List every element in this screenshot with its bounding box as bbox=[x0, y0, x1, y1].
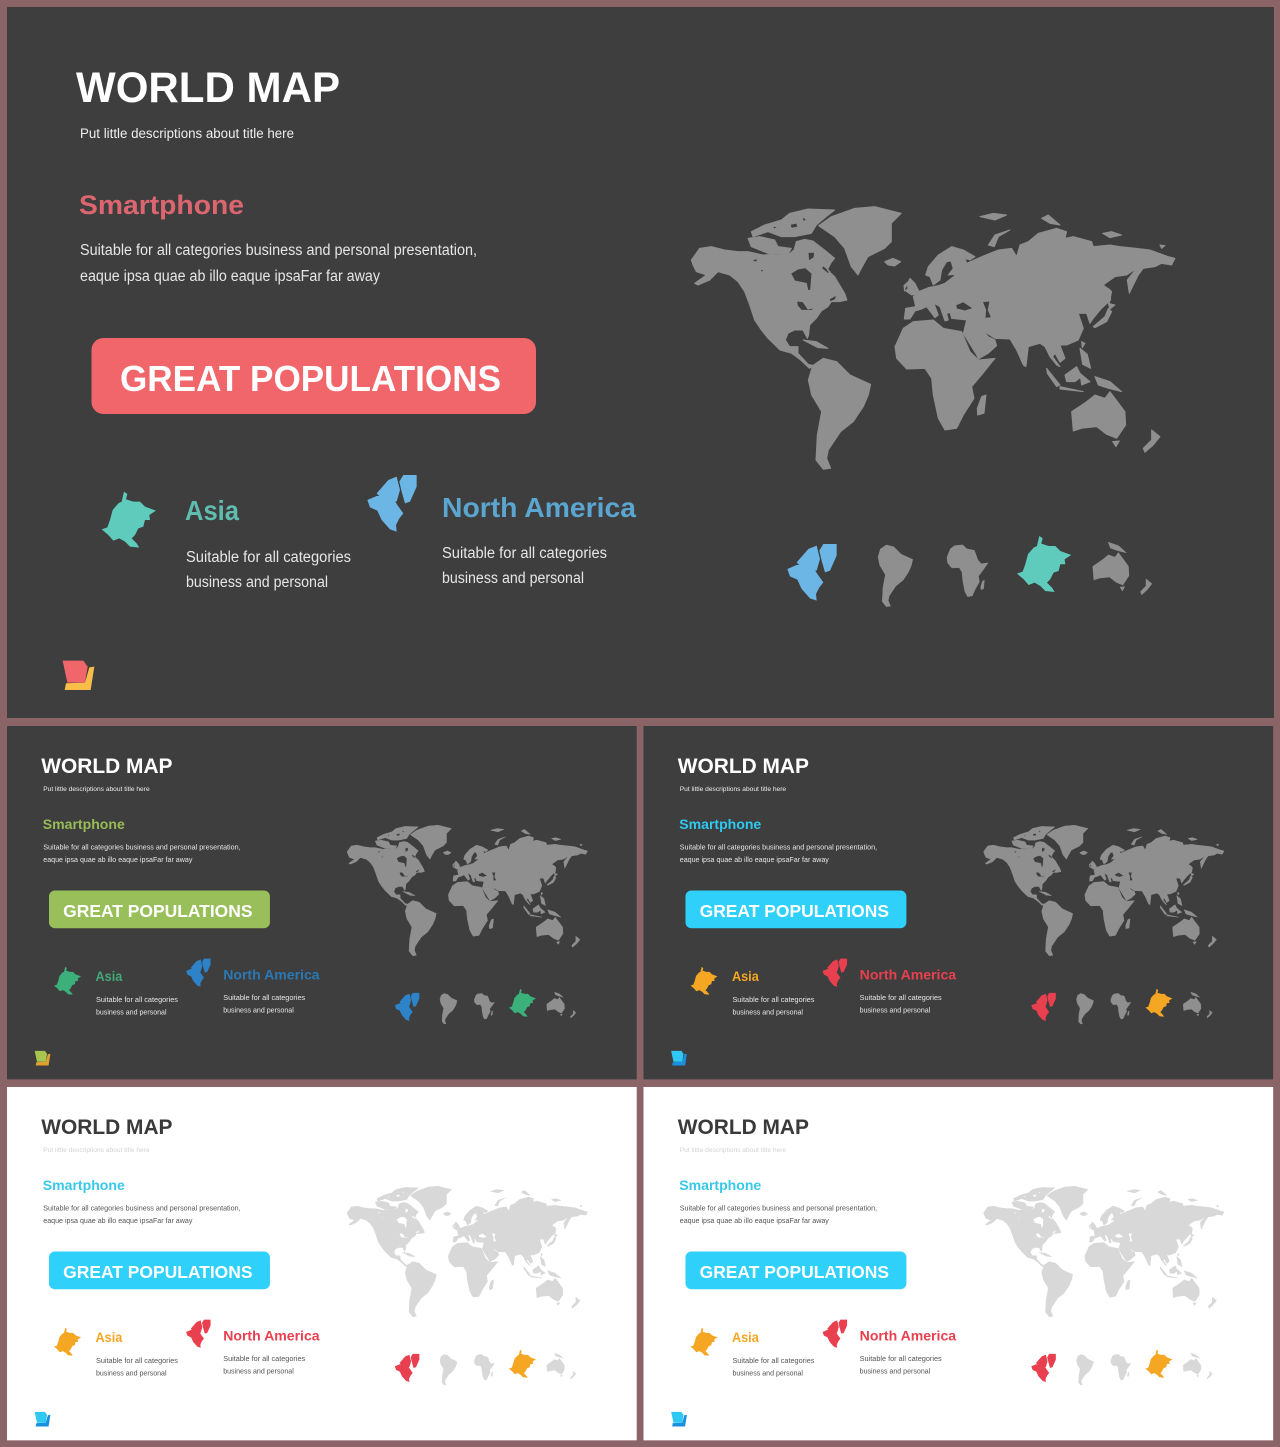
subtitle: Put little descriptions about title here bbox=[43, 1147, 150, 1154]
heading: North America: North America bbox=[860, 1328, 957, 1343]
description text bbox=[43, 1203, 241, 1225]
Asia description: business and personal bbox=[96, 1368, 167, 1377]
callout button: great populations: GREAT POPULATIONS bbox=[63, 1262, 253, 1282]
panel: large dark slide bbox=[7, 7, 1274, 718]
mini continent: Asia bbox=[1017, 536, 1071, 592]
description text: Suitable for all categories business and personal presentation, bbox=[680, 842, 877, 851]
mini continent: Africa bbox=[474, 1354, 495, 1380]
icon: North America bbox=[186, 959, 211, 987]
subtitle: Put little descriptions about title here bbox=[43, 786, 150, 793]
description text: eaque ipsa quae ab illo eaque ipsaFar far away bbox=[680, 855, 829, 864]
heading: Asia: Asia bbox=[732, 1330, 759, 1345]
world map bbox=[347, 825, 587, 956]
mini continent: Australia bbox=[1093, 542, 1152, 595]
North America description: business and personal bbox=[860, 1366, 931, 1375]
mini continent: Australia bbox=[1183, 992, 1212, 1018]
title: WORLD MAP bbox=[76, 64, 340, 112]
icon: North America bbox=[823, 959, 847, 987]
Asia description bbox=[186, 549, 351, 591]
description text: eaque ipsa quae ab illo eaque ipsaFar far away bbox=[80, 268, 380, 285]
description text: eaque ipsa quae ab illo eaque ipsaFar far away bbox=[43, 855, 193, 864]
world map bbox=[984, 1186, 1224, 1317]
North America description: Suitable for all categories bbox=[223, 993, 305, 1002]
mini continent: South America bbox=[1076, 993, 1094, 1024]
world map bbox=[691, 207, 1175, 469]
icon: Asia bbox=[691, 1328, 718, 1356]
callout button: great populations: GREAT POPULATIONS bbox=[700, 1262, 889, 1282]
mini continent: North America bbox=[1031, 1354, 1056, 1382]
North America description bbox=[223, 993, 305, 1014]
Asia description: business and personal bbox=[732, 1368, 803, 1377]
mini continent: Australia bbox=[1183, 1353, 1212, 1379]
mini continent: Africa bbox=[947, 545, 988, 597]
icon: Asia bbox=[54, 967, 81, 995]
logo icon bbox=[671, 1412, 687, 1426]
North America description: Suitable for all categories bbox=[223, 1354, 305, 1363]
Asia description: Suitable for all categories bbox=[732, 1356, 815, 1365]
description text: eaque ipsa quae ab illo eaque ipsaFar far away bbox=[680, 1216, 829, 1225]
mini continent: Asia bbox=[509, 1350, 536, 1378]
mini continent: Africa bbox=[474, 993, 495, 1019]
icon: North America bbox=[186, 1320, 211, 1348]
North America description: business and personal bbox=[442, 570, 584, 587]
logo icon bbox=[35, 1051, 50, 1065]
mini continent: North America bbox=[395, 993, 419, 1021]
mini continent: North America bbox=[1031, 993, 1056, 1021]
heading: North America: North America bbox=[223, 967, 320, 982]
mini continent: South America bbox=[878, 545, 913, 607]
mini continent: Asia bbox=[1145, 1350, 1172, 1378]
callout button: great populations: GREAT POPULATIONS bbox=[63, 901, 253, 921]
description text: eaque ipsa quae ab illo eaque ipsaFar far away bbox=[43, 1216, 193, 1225]
description text bbox=[680, 1203, 877, 1225]
heading: Smartphone: Smartphone bbox=[43, 817, 125, 832]
North America description: business and personal bbox=[223, 1005, 294, 1014]
Asia description: business and personal bbox=[732, 1007, 803, 1016]
Asia description: Suitable for all categories bbox=[186, 549, 351, 566]
North America description bbox=[860, 993, 942, 1014]
mini continent: Australia bbox=[547, 992, 576, 1018]
icon: Asia bbox=[691, 967, 718, 995]
Asia description: Suitable for all categories bbox=[96, 1356, 178, 1365]
North America description bbox=[223, 1354, 305, 1375]
mini continent: South America bbox=[440, 993, 457, 1024]
mini continent: Australia bbox=[547, 1353, 576, 1379]
North America description: business and personal bbox=[860, 1005, 931, 1014]
icon: North America bbox=[367, 475, 417, 532]
description text bbox=[80, 242, 477, 285]
title: WORLD MAP bbox=[41, 754, 172, 778]
Asia description bbox=[96, 995, 178, 1016]
mini continent: Africa bbox=[1111, 993, 1131, 1019]
North America description: Suitable for all categories bbox=[860, 1354, 942, 1363]
Asia description bbox=[96, 1356, 178, 1377]
Asia description bbox=[732, 1356, 815, 1377]
logo icon bbox=[35, 1412, 50, 1426]
description text bbox=[43, 842, 241, 864]
North America description bbox=[860, 1354, 942, 1375]
callout button: great populations bbox=[49, 1252, 270, 1289]
subtitle: Put little descriptions about title here bbox=[680, 1147, 786, 1154]
Asia description bbox=[732, 995, 815, 1016]
callout button: great populations: GREAT POPULATIONS bbox=[700, 901, 889, 921]
description text: Suitable for all categories business and personal presentation, bbox=[680, 1203, 877, 1212]
description text: Suitable for all categories business and personal presentation, bbox=[43, 1203, 241, 1212]
subtitle: Put little descriptions about title here bbox=[680, 786, 786, 793]
callout button: great populations: GREAT POPULATIONS bbox=[120, 358, 501, 399]
description text: Suitable for all categories business and personal presentation, bbox=[80, 242, 477, 259]
North America description: business and personal bbox=[223, 1366, 294, 1375]
Asia description: Suitable for all categories bbox=[96, 995, 178, 1004]
icon: Asia bbox=[102, 492, 156, 548]
title: WORLD MAP bbox=[678, 754, 809, 778]
mini continent: Asia bbox=[509, 989, 536, 1017]
heading: Smartphone: Smartphone bbox=[79, 190, 244, 220]
panel: small white slide, left bbox=[7, 1087, 637, 1440]
subtitle: Put little descriptions about title here bbox=[80, 126, 294, 141]
mini continent: Africa bbox=[1111, 1354, 1131, 1380]
callout button: great populations bbox=[685, 1252, 906, 1289]
logo icon bbox=[671, 1051, 687, 1065]
world map bbox=[347, 1186, 587, 1317]
mini continent: South America bbox=[440, 1354, 457, 1385]
logo icon bbox=[63, 661, 94, 690]
panel: small white slide, right bbox=[643, 1087, 1273, 1440]
title: WORLD MAP bbox=[678, 1115, 809, 1139]
callout button: great populations bbox=[685, 891, 906, 928]
mini continent: North America bbox=[787, 544, 837, 601]
heading: Asia: Asia bbox=[95, 1330, 123, 1345]
icon: North America bbox=[823, 1320, 847, 1348]
mini continent: Asia bbox=[1145, 989, 1172, 1017]
Asia description: business and personal bbox=[96, 1007, 167, 1016]
Asia description: Suitable for all categories bbox=[732, 995, 815, 1004]
heading: Asia: Asia bbox=[185, 495, 240, 526]
description text: Suitable for all categories business and personal presentation, bbox=[43, 842, 241, 851]
heading: North America: North America bbox=[442, 492, 637, 523]
title: WORLD MAP bbox=[41, 1115, 172, 1139]
North America description: Suitable for all categories bbox=[442, 545, 607, 562]
heading: North America: North America bbox=[860, 967, 957, 982]
callout button: great populations bbox=[92, 338, 536, 414]
heading: Smartphone: Smartphone bbox=[679, 1178, 761, 1193]
heading: Smartphone: Smartphone bbox=[43, 1178, 125, 1193]
mini continent: South America bbox=[1076, 1354, 1094, 1385]
heading: North America: North America bbox=[223, 1328, 320, 1343]
icon: Asia bbox=[54, 1328, 81, 1356]
panel: small dark slide, cyan bbox=[643, 726, 1273, 1079]
North America description: Suitable for all categories bbox=[860, 993, 942, 1002]
mini continent: North America bbox=[395, 1354, 419, 1382]
heading: Asia: Asia bbox=[95, 969, 123, 984]
description text bbox=[680, 842, 877, 864]
heading: Smartphone: Smartphone bbox=[679, 817, 761, 832]
Asia description: business and personal bbox=[186, 574, 328, 591]
heading: Asia: Asia bbox=[732, 969, 759, 984]
panel: small dark slide, green bbox=[7, 726, 637, 1079]
callout button: great populations bbox=[49, 891, 270, 928]
North America description bbox=[442, 545, 607, 587]
world map bbox=[984, 825, 1224, 956]
